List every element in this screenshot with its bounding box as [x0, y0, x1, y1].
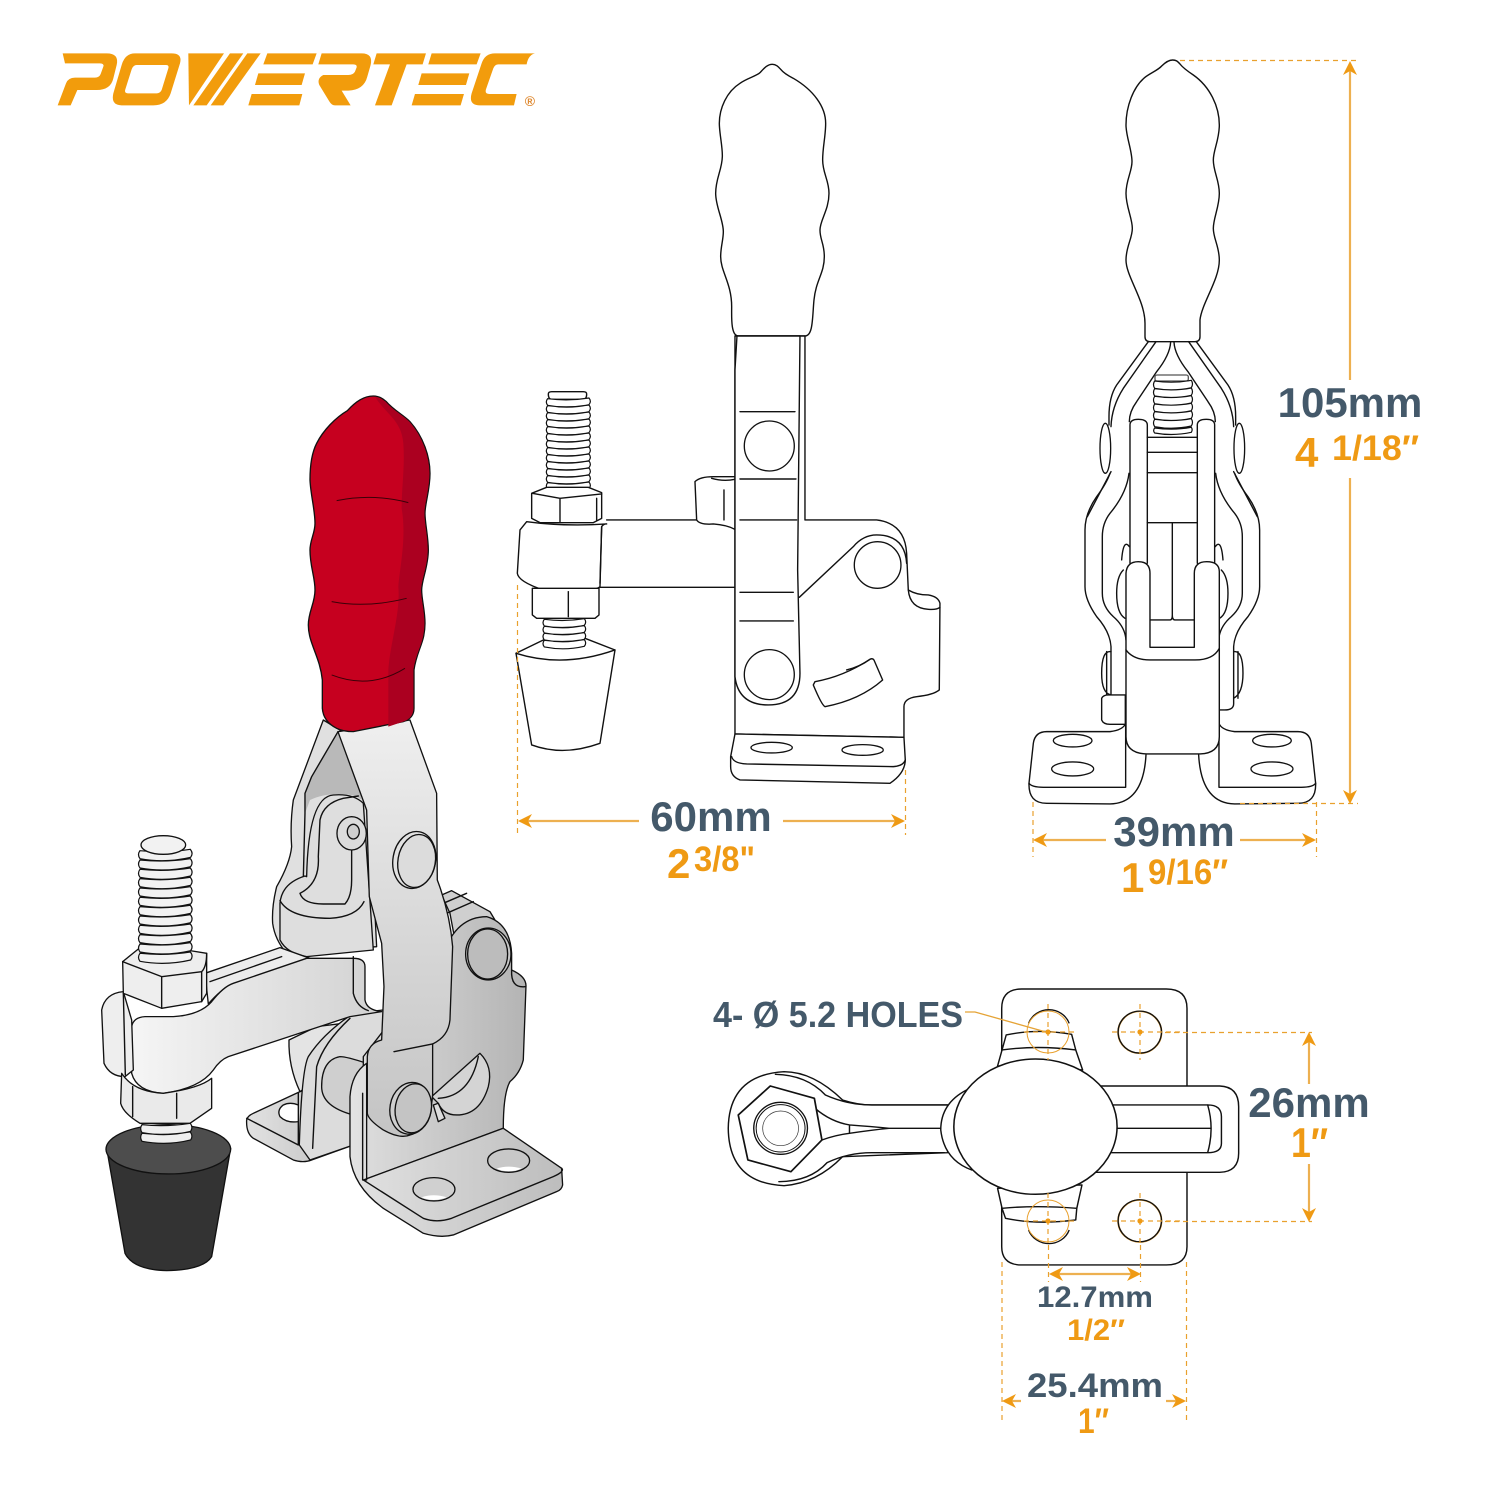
dimension: width 39mm: [1033, 802, 1316, 901]
side elevation line drawing: handle: [1126, 60, 1219, 342]
left side plates: [1029, 342, 1171, 804]
lever bar with pivots: [735, 336, 800, 705]
dimension: width 39mm: 9/16″: [1148, 853, 1228, 892]
dimension: width 39mm: 39mm: [1113, 808, 1235, 855]
central block: [1147, 437, 1197, 620]
rubber tip with lower thread: [516, 619, 615, 750]
upper hex nut: [532, 487, 602, 523]
small stop block: [1102, 695, 1125, 724]
lower hex nut: [532, 588, 599, 618]
orange hole centre marks: [1024, 1004, 1180, 1245]
dimension: width 60mm: 2: [667, 840, 690, 887]
rear mounting foot: [247, 1073, 353, 1162]
base flange with holes: [731, 734, 905, 783]
body pivot and ramp: [799, 535, 907, 597]
body outline: [735, 336, 940, 737]
logo: POWERTEC: ®: [525, 93, 536, 109]
dimension: plate width 25.4mm: 25.4mm: [1027, 1367, 1163, 1405]
mounting plate: [1002, 989, 1187, 1265]
dimension: hole spacing 26mm: 1″: [1291, 1119, 1328, 1166]
red rubber grip: [308, 396, 430, 732]
grip end ellipse: [941, 1059, 1117, 1194]
right end bar loop: [1094, 1086, 1239, 1172]
front elevation line drawing: clamp body: [516, 336, 940, 783]
label: 4 holes with leader: 4- Ø 5.2 HOLES: [713, 994, 963, 1035]
dimension: width 60mm: [518, 585, 906, 887]
dimension: hole spacing 26mm: [1165, 1032, 1370, 1222]
lever with handle bar: [338, 720, 453, 1136]
dimension: hole spacing 26mm: 26mm: [1248, 1079, 1370, 1126]
end lobe and top nut with threaded stud: [102, 836, 207, 1077]
pivot pin: [466, 928, 511, 980]
dimension: height 105mm: [1180, 60, 1422, 804]
leaf slot on body: [432, 1053, 490, 1122]
dimension: plate width 25.4mm: [1002, 1262, 1186, 1441]
dimension: hole spacing 12.7mm: 1/2″: [1067, 1314, 1125, 1347]
dimension: height 105mm: 1/18″: [1332, 429, 1419, 468]
dimension: width 39mm: 1: [1121, 854, 1144, 901]
right side plates: [1174, 342, 1316, 804]
lever rivets: [386, 828, 440, 1137]
arm and stop tab: [600, 477, 735, 587]
curved slot: [813, 659, 883, 707]
front mounting foot with holes: [350, 1063, 563, 1236]
threaded stud: [546, 392, 590, 491]
fork yoke: [1126, 562, 1219, 754]
left clamping arm: [728, 1072, 948, 1186]
dimension: width 60mm: 3/8": [694, 840, 755, 879]
black rubber tip: [106, 1123, 231, 1271]
dimension: hole spacing 12.7mm: 12.7mm: [1037, 1281, 1153, 1314]
rear ear plate: [272, 720, 377, 953]
logo: POWERTEC: [58, 53, 536, 109]
grip end cross pieces: [998, 1031, 1083, 1222]
link with collar: [280, 795, 373, 957]
central stud thread: [1153, 375, 1192, 435]
rear body web: [289, 1010, 383, 1160]
mounting holes: [1029, 1010, 1162, 1244]
dimension: width 60mm: 60mm: [650, 793, 772, 840]
ear lower curve: [908, 590, 940, 609]
clamping arm: [132, 948, 382, 1093]
clamp head: [517, 522, 607, 590]
side elevation line drawing: clamp body: [1029, 342, 1316, 804]
dimension: plate width 25.4mm: 1″: [1078, 1402, 1109, 1441]
front elevation line drawing: handle: [716, 64, 829, 336]
small rivet on link: [337, 817, 366, 850]
dimension: hole spacing 12.7mm: [1037, 1245, 1153, 1347]
dimension: height 105mm: 105mm: [1278, 379, 1422, 426]
lower nut: [121, 1073, 212, 1123]
main body plate: [363, 891, 526, 1180]
perspective colour view of toggle clamp: [102, 720, 563, 1271]
top plan view line drawing: [728, 989, 1239, 1265]
dimension: height 105mm: 4: [1295, 429, 1319, 476]
